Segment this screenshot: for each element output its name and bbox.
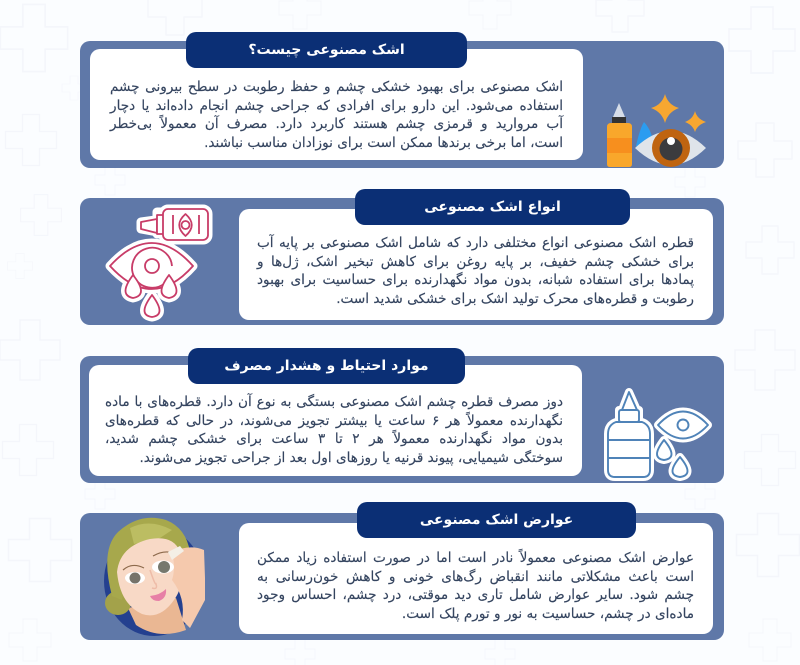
icon: orange bottle and eye bbox=[607, 94, 706, 167]
body text: چشم شود. سایر عوارض شامل تاری دید موقتی، درد چشم، احساس وجود bbox=[257, 587, 694, 603]
heading: precautions and warnings: موارد احتیاط و هشدار مصرف bbox=[224, 358, 429, 374]
body text: سوختگی شیمیایی، پیوند قرنیه یا روزهای اول بعد از جراحی تجویز می‌شوند. bbox=[139, 450, 563, 466]
body text: پمادها برای استفاده شبانه، بدون مواد نگهدارنده برای حساسیت برای بهبود bbox=[257, 272, 694, 288]
body text: اشک مصنوعی برای بهبود خشکی چشم و حفظ رطوبت در سطح بیرونی چشم bbox=[110, 79, 563, 95]
body text: برای خشکی چشم خفیف، بر پایه روغن برای کاهش تبخیر اشک، ژل‌ها و bbox=[257, 254, 694, 270]
body text: دوز مصرف قطره چشم اشک مصنوعی بستگی به نوع آن دارد. قطره‌های با ماده bbox=[105, 394, 563, 410]
heading: side effects bbox=[357, 502, 636, 538]
body text bbox=[256, 234, 694, 307]
icon: bottle, eye and drops bbox=[604, 388, 712, 481]
body text bbox=[109, 79, 564, 151]
panel: what are artificial tears bbox=[80, 41, 724, 168]
text card bbox=[90, 49, 583, 160]
body text: استفاده می‌شود. این دارو برای افرادی که جراحی چشم انجام داده‌اند یا دچار bbox=[110, 98, 563, 114]
body text: رطوبت و قطره‌های محرک تولید اشک برای خشکی شدید است. bbox=[336, 290, 694, 306]
body text: آب مروارید و قرمزی چشم هستند کاربرد دارد. مصرف آن معمولاً بی‌خطر bbox=[110, 116, 563, 132]
heading: side effects: عوارض اشک مصنوعی bbox=[420, 512, 573, 528]
body text bbox=[257, 548, 694, 622]
body text: است، اما برخی برندها ممکن است برای نوزادان مناسب نباشند. bbox=[204, 134, 563, 150]
icon: dropper and tearing eye bbox=[106, 204, 212, 322]
body text: قطره اشک مصنوعی انواع مختلفی دارد که شامل اشک مصنوعی بر پایه آب bbox=[257, 235, 694, 251]
text card bbox=[89, 365, 582, 476]
body text bbox=[105, 393, 563, 466]
heading: what are artificial tears bbox=[186, 32, 467, 68]
heading: what are artificial tears: اشک مصنوعی چیست؟ bbox=[248, 42, 405, 58]
panel: precautions and warnings bbox=[80, 356, 724, 483]
heading: types of artificial tears: انواع اشک مصنوعی bbox=[424, 199, 561, 215]
body text: است باعث مشکلاتی مانند انقباض رگ‌های خونی و کاهش خون‌رسانی به bbox=[257, 568, 694, 584]
text card bbox=[239, 209, 713, 320]
body text: نگهدارنده معمولاً هر ۶ ساعت یا بیشتر تجویز می‌شوند، در حالی که قطره‌های bbox=[105, 412, 563, 428]
body text: بدون مواد نگهدارنده معمولاً هر ۲ تا ۳ ساعت برای خشکی چشم شدید، bbox=[105, 431, 563, 447]
body text: ماده‌ای در چشم، حساسیت به نور و تورم پلک است. bbox=[402, 606, 694, 622]
body text: عوارض اشک مصنوعی معمولاً نادر است اما در صورت استفاده زیاد ممکن bbox=[257, 550, 694, 566]
heading: types of artificial tears bbox=[355, 189, 630, 225]
heading: precautions and warnings bbox=[188, 348, 465, 384]
panel: types of artificial tears bbox=[80, 198, 724, 325]
panel: side effects bbox=[80, 513, 724, 640]
illustration: woman applying eye drops bbox=[104, 518, 205, 636]
text card bbox=[239, 523, 713, 634]
